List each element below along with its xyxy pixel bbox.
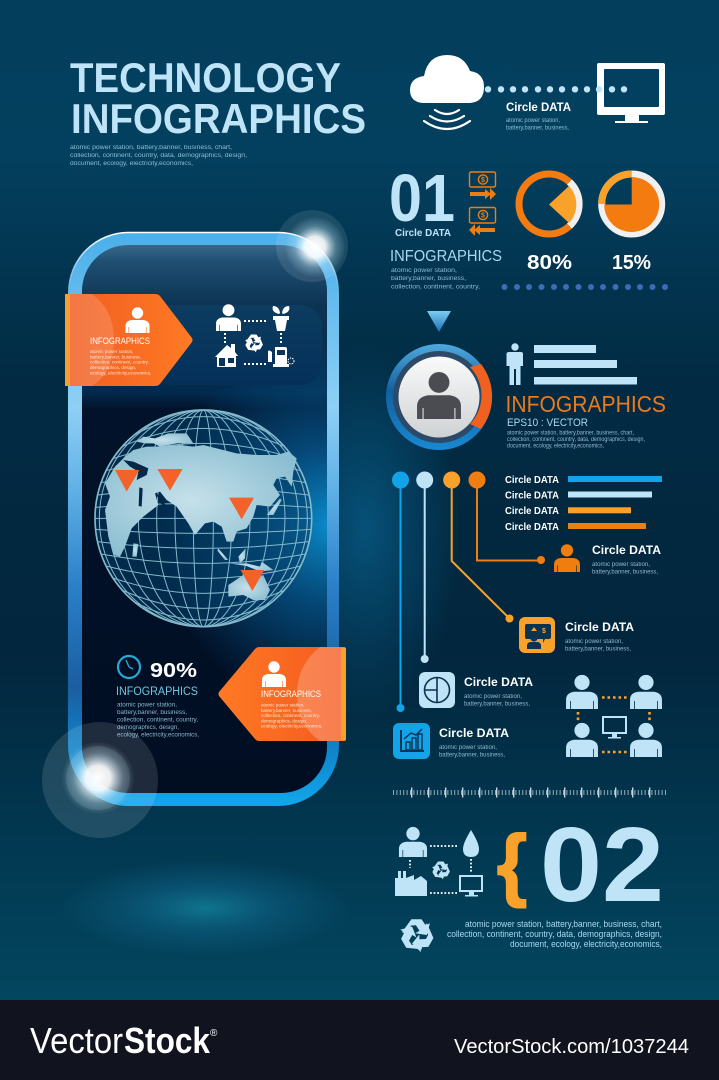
footer logo: Vector	[30, 1020, 123, 1061]
description: collection, continent, country,	[391, 284, 480, 290]
bar chart: circle data: Circle DATA	[505, 490, 559, 502]
heading: INFOGRAPHICS	[506, 391, 666, 417]
description: document, ecology, electricity,economics,	[510, 939, 662, 949]
label: Circle DATA	[506, 102, 571, 114]
description: atomic power station,	[117, 702, 177, 708]
label: Circle DATA	[565, 620, 634, 634]
avatar ring	[386, 344, 492, 450]
description: battery,banner, business,	[464, 702, 530, 708]
icon: chart box	[393, 723, 430, 759]
item: presentation	[519, 617, 634, 653]
icon: presentation box: $	[542, 628, 546, 635]
icon: recycling	[397, 919, 438, 956]
footer url: VectorStock.com/1037244	[454, 1036, 689, 1058]
icon: fuel pump	[268, 347, 289, 367]
description	[592, 562, 658, 576]
description	[565, 639, 631, 652]
description: battery,banner, business,	[506, 126, 569, 132]
title description: document, ecology, electricity,economics,	[70, 161, 193, 167]
tag text: demographics, design,	[261, 718, 307, 723]
heading: INFOGRAPHICS	[390, 248, 502, 265]
tag text	[261, 702, 322, 729]
subheading: EPS10 : VECTOR	[507, 417, 588, 429]
yellow connector	[443, 472, 514, 622]
description	[439, 745, 505, 758]
light flare: top right	[276, 210, 348, 282]
description	[391, 268, 480, 290]
panel: 90% stat	[116, 656, 199, 738]
orange connector	[468, 472, 545, 564]
number 02: 02	[540, 806, 664, 924]
label: Circle DATA	[592, 543, 661, 557]
icon: avatar	[417, 372, 461, 419]
icon: money transfer: $	[481, 177, 485, 184]
globe grid	[95, 410, 312, 627]
description: collection, continent, country,	[117, 718, 198, 724]
chart: pie 15%	[602, 174, 662, 234]
chart: pie 80%	[519, 174, 579, 234]
icon: house	[215, 344, 238, 367]
tag heading: INFOGRAPHICS	[90, 336, 150, 346]
description: atomic power station, battery,banner, business, chart,	[507, 430, 634, 436]
footer logo: Stock	[124, 1020, 211, 1061]
item: chart box	[393, 723, 509, 759]
icon: pie box	[419, 672, 455, 708]
footer	[0, 1000, 719, 1080]
orange brace: {	[497, 819, 527, 908]
title	[70, 54, 366, 142]
icon: clock	[118, 656, 140, 678]
label: Circle DATA	[395, 227, 451, 239]
map marker 3	[229, 498, 254, 519]
map marker 4	[241, 570, 264, 591]
title description	[70, 145, 247, 167]
description: battery,banner, business,	[391, 276, 466, 282]
item: orange person	[554, 543, 661, 576]
value 15%: 15%	[612, 252, 651, 274]
icon group: person, drop, factory, monitor	[395, 827, 483, 896]
panel: bottom orange tag	[218, 647, 346, 741]
description: atomic power station, battery,banner, business, chart,	[465, 919, 662, 929]
globe inland seas	[123, 460, 166, 507]
description: battery,banner, business,	[117, 710, 187, 716]
tag text: battery,banner, business,	[90, 354, 141, 359]
icon: cloud	[410, 55, 484, 103]
tag text: battery,banner, business,	[261, 708, 312, 713]
icon: person	[216, 304, 241, 331]
icon: water drop	[463, 830, 479, 857]
tag text: demographics, design,	[90, 365, 136, 370]
tag text	[90, 349, 151, 375]
icon: person	[399, 827, 427, 857]
number 01: 01	[389, 161, 455, 236]
label: Circle DATA	[464, 675, 533, 689]
down arrow	[427, 311, 451, 332]
icon: person	[126, 307, 150, 333]
bar chart: circle data	[505, 474, 662, 533]
bar chart: circle data: Circle DATA	[505, 505, 559, 517]
description: collection, continent, country, data, demographics, design,	[447, 929, 662, 939]
icon: signal arcs	[424, 110, 470, 129]
item: pie box	[419, 672, 533, 708]
globe continents	[105, 433, 297, 600]
description: ecology, electricity,economics,	[117, 732, 199, 738]
phone frame	[75, 239, 332, 799]
panel: section 01	[389, 161, 668, 290]
tag text: collection, continent, country,	[261, 713, 320, 718]
description: battery,banner, business,	[565, 646, 631, 652]
tag text: ecology, electricity,economics,	[261, 724, 322, 729]
tag text: collection, continent, country,	[90, 360, 149, 365]
description: battery,banner, business,	[439, 752, 505, 758]
panel: top orange tag	[65, 294, 192, 386]
icon: monitor	[459, 875, 483, 896]
phone	[68, 232, 339, 806]
panel: timeline connectors	[392, 472, 545, 712]
icon: person	[554, 544, 580, 572]
description	[506, 118, 569, 132]
title: TECHNOLOGY	[70, 54, 341, 101]
description	[464, 694, 530, 708]
dotted divider	[502, 284, 668, 290]
icon: money transfer: $	[481, 212, 485, 220]
description: atomic power station,	[391, 268, 457, 274]
glass panel	[150, 305, 322, 385]
map marker 1	[115, 470, 139, 492]
description: atomic power station,	[464, 694, 522, 700]
blue connector	[392, 472, 409, 712]
dotted links	[225, 321, 281, 364]
icon: recycling	[430, 861, 452, 881]
icon: money transfer	[469, 172, 496, 236]
globe	[95, 410, 312, 627]
tag heading: INFOGRAPHICS	[261, 689, 321, 699]
title: INFOGRAPHICS	[71, 95, 366, 142]
bar chart: circle data: Circle DATA	[505, 474, 559, 486]
icon: people network	[566, 675, 662, 757]
icon: recycling	[243, 334, 265, 354]
description: collection, continent, country, data, demographics, design,	[507, 437, 645, 443]
bars	[534, 345, 637, 384]
bar chart: circle data: Circle DATA	[505, 521, 559, 533]
light flare: bottom left	[42, 722, 158, 838]
light connector	[416, 472, 433, 663]
footer logo	[30, 1020, 218, 1061]
panel: cloud to monitor	[410, 55, 665, 132]
title description: collection, continent, country, data, demographics, design,	[70, 153, 247, 159]
title description: atomic power station, battery,banner, business, chart,	[70, 145, 232, 151]
icon: person	[262, 661, 286, 687]
description: battery,banner, business,	[592, 570, 658, 576]
icon: plant	[273, 306, 289, 331]
panel: section 02	[395, 806, 664, 956]
dotted links	[410, 846, 471, 893]
value 80%: 80%	[527, 252, 572, 274]
description	[447, 919, 662, 949]
tag text: atomic power station,	[261, 702, 304, 708]
heading: INFOGRAPHICS	[116, 686, 198, 698]
icon: monitor	[597, 63, 665, 123]
description: document, ecology, electricity,economics,	[507, 444, 604, 450]
panel: profile	[386, 311, 666, 450]
description: atomic power station,	[439, 745, 497, 751]
description: atomic power station,	[592, 562, 650, 568]
percentage: 90%	[150, 660, 197, 682]
map marker 2	[157, 469, 183, 491]
description	[507, 430, 645, 450]
tag text: ecology, electricity,economics,	[90, 370, 151, 375]
label: Circle DATA	[439, 726, 509, 740]
tag text: atomic power station,	[90, 349, 133, 354]
description: atomic power station,	[565, 639, 623, 645]
description: demographics, design,	[117, 725, 179, 731]
dotted connector	[485, 86, 627, 93]
footer logo: ®	[210, 1028, 218, 1039]
description	[117, 702, 199, 738]
icon group: person, plant, house, fuel	[215, 304, 294, 367]
icon: standing person	[506, 343, 523, 385]
ruler	[393, 790, 666, 795]
icon: factory	[395, 871, 427, 896]
phone screen	[82, 245, 327, 793]
description: atomic power station,	[506, 118, 560, 124]
